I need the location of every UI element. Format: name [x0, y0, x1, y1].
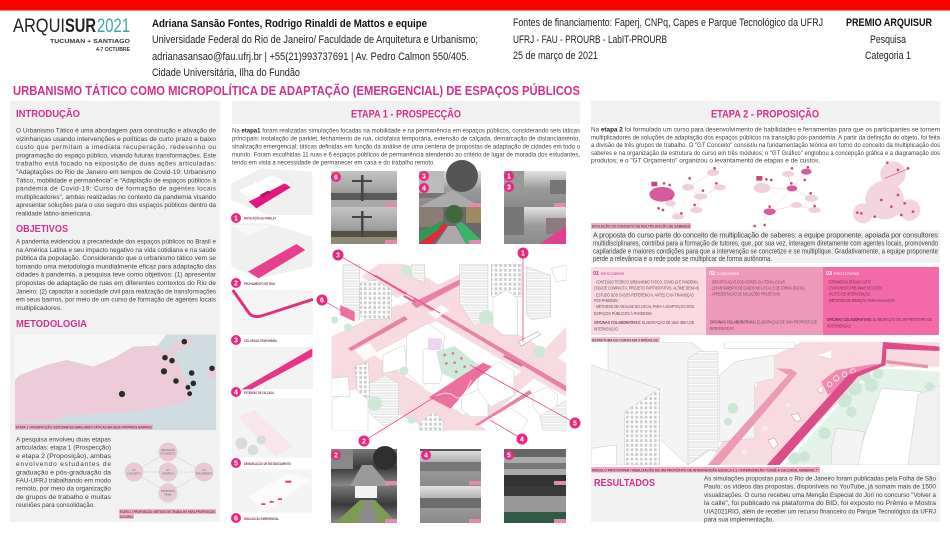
tactic 4: sidewalk extension: [231, 347, 313, 397]
photo pair 5: [504, 449, 566, 523]
module 02: OFICINAS COLABORATIVAS: ELABORAÇÃO DE UMA PROPOSTA DE: [710, 320, 817, 324]
module 01: PÓS-PANDEMIA: [594, 298, 618, 303]
pointer lines: [322, 253, 575, 441]
text: metodologia: reuniões para consolidação.: [16, 502, 95, 509]
text: objetivos: na América Latina e seu impacto negativo na vida cotidiana e na saúde: [16, 247, 216, 254]
photo pair 2: 2: [334, 452, 338, 460]
module 02: [706, 267, 823, 335]
photo pair 6: 6: [334, 174, 338, 182]
diagram: working groups: GT: [132, 468, 136, 472]
diagram: working groups: GT: [166, 468, 170, 472]
logo: Arquisur 2021: 4-7 OCTUBRE: [96, 47, 130, 53]
text: introdução: "Adaptações do Rio de Janeiro em tempos de Covid-19: Urbanismo: [16, 169, 216, 176]
photo pair 3 and 4: 4: [422, 186, 426, 192]
callout numbers: 3: [336, 252, 340, 260]
diagram: working groups: GT: [202, 468, 206, 472]
text: objetivos: Janeiro; (2) capacitar a sociedade civil para realização de transformações: [16, 288, 217, 295]
module 03: [823, 267, 939, 335]
funding block: UFRJ - FAU - PROURB - LabIT-PROURB: [513, 34, 667, 46]
buildings: [331, 264, 566, 431]
parklet: [518, 332, 541, 346]
panel: etapa 1: [231, 101, 581, 523]
module 02: - IDENTIFICAÇÃO DOS ATORES OU ITENS LOCAIS: [710, 280, 785, 284]
top red band: [0, 0, 950, 10]
diagram: working groups: PROPOSTA: [161, 489, 175, 493]
text: etapa 1: mundo. Foram escolhidas 11 ruas e 6 espaços públicos de permanência atendendo ao critério de lugar de moradia dos estudantes,: [232, 152, 580, 158]
park: [436, 346, 479, 381]
diagram: multiplication of knowledge: [649, 161, 920, 227]
text: objetivos: A pandemia evidenciou a precariedade dos espaços públicos no Brasil e: [16, 238, 216, 246]
text: etapa 1: Na etapa1 foram realizadas simulações focadas na mobilidade e na permanência em espaços públicos, considerando seis táticas: [232, 128, 581, 134]
caption: etapa 2: DO CURSO: [120, 515, 133, 519]
callout numbers: 1: [521, 250, 525, 258]
isometric prototype illustration: [591, 342, 940, 465]
central isometric street illustration: [331, 264, 566, 431]
left lane: [708, 368, 797, 465]
caption: módulo prototipar: [591, 467, 820, 472]
tactic 4: sidewalk extension: EXTENSÃO DE CALÇADA: [244, 390, 274, 395]
cluster 2: [753, 166, 821, 227]
caption: etapa 1: ETAPA 1 / PROSPECÇÃO: ESTUDANTES SIMULANDO TÁTICAS EM SEUS PRÓPRIOS BAIRROS: [16, 424, 152, 429]
heading: etapa 2: [591, 101, 940, 124]
tactic 6: emergency signage: 6: [234, 516, 238, 522]
tactic 5: distancing marks: [231, 398, 312, 468]
diagram: working groups: CONCEITO: [127, 472, 141, 476]
logo: Arquisur 2021: TUCUMAN + SANTIAGO: [50, 39, 131, 45]
diagram: working groups: ORÇAMENTO: [196, 472, 212, 476]
diagram: working groups: FINAL: [164, 492, 172, 496]
cluster 1: [649, 167, 726, 220]
text: introdução: programação do espaço público, visando futuras transformações. Este: [16, 152, 216, 159]
module 03: - LEVANTAMENTO PRELIMINAR DE CUSTOS: [827, 286, 882, 290]
trees: [724, 368, 934, 464]
authors block: Universidade Federal do Rio de Janeiro/ Faculdade de Arquitetura e Urbanismo;: [152, 34, 478, 46]
callout numbers: 5: [573, 420, 577, 428]
green area: [785, 368, 940, 465]
main title: URBANISMO TÁTICO COMO MICROPOLÍTICA DE ADAPTAÇÃO (EMERGENCIAL) DE ESPAÇOS PÚBLICOS: [13, 83, 580, 98]
caption: etapa 2: [119, 509, 216, 519]
heading: introdução: INTRODUÇÃO: [16, 107, 80, 120]
panel: resultados: [591, 472, 940, 524]
module 01: CIDADE COMPACTA, PROJETO PARTICIPATIVO, ALTINE DEMAIS: [594, 286, 699, 290]
text: resultados: Paulo; os vídeos das propostas, disponíveis no YouTube, já somam mais de 1500: [704, 484, 936, 491]
photo pair 2: [331, 446, 397, 523]
authors block: Cidade Universitária, Ilha do Fundão: [152, 67, 300, 79]
diagram: working groups: DEFINIÇÃO: [161, 447, 175, 452]
text: introdução: realidade latino-americana.: [16, 210, 92, 218]
module 03: 03 PROTOTIPAR: [826, 271, 859, 277]
caption: etapa 2: ETAPA 2 / PROPOSIÇÃO: MÉTODO DE TRABALHO PARA PROPOSIÇÃO: [120, 509, 215, 514]
module 01: INTERVENÇÃO: [594, 326, 618, 332]
authors block: Adriana Sansão Fontes, Rodrigo Rinaldi de Mattos e equipe: [152, 18, 427, 30]
logo: Arquisur 2021: ARQUI: [13, 15, 65, 37]
text: introdução: [16, 128, 217, 218]
module 03: OFICINAS COLABORATIVAS: ELABORAÇÃO DE UM PROTÓTIPO DE: [827, 317, 932, 322]
tactic 2: street closing: [231, 223, 312, 288]
caption: estrutura do curso: [591, 337, 660, 342]
module 03: - MÉTODOS DE MEDIÇÃO PARA AVALIAÇÃO: [827, 298, 895, 303]
text: objetivos: multiplicadores.: [16, 305, 62, 312]
caption: evolução do conceito: [591, 223, 691, 229]
funding block: Fontes de financiamento: Faperj, CNPq, Capes e Parque Tecnológico da UFRJ: [513, 17, 823, 29]
caption: módulo prototipar: MÓDULO PROTOTIPAR / REALIZAÇÃO DE UM PROTÓTIPO DE INTERVENÇÃO ESCALA 1:1 / INTERVENÇÃO "CADÊ A CALÇADA, GENERAL?": [592, 467, 819, 472]
heading: metodologia: METODOLOGIA: [16, 319, 88, 330]
text: objetivos: tornando uma metodologia mundialmente eficaz para adaptação das: [16, 263, 217, 270]
heading: objetivos: OBJETIVOS: [16, 224, 68, 235]
module 01: 01 DESCOBRIR: [593, 271, 625, 277]
road markings: [742, 403, 790, 455]
authors block: adrianasansao@fau.ufrj.br | +55(21)993737691 | Av. Pedro Calmon 550/405.: [152, 51, 469, 63]
text: etapa 2: Na etapa 2 foi formulado um curso para desenvolvimento de habilidades e ferramentas para que os participantes se tornem: [591, 126, 940, 134]
heading: etapa 1: ETAPA 1 - PROSPECÇÃO: [351, 108, 461, 120]
photo pair 3 and 4: 3: [422, 174, 426, 180]
parked marks: [768, 385, 823, 448]
main lane: [767, 342, 940, 465]
text: introdução: pandemia de Covid-19: Curso de formação de agentes locais: [16, 186, 217, 193]
panel: left column: [10, 101, 220, 522]
text: etapa 2: produtos; e o "GT Orçamento" organizou o levantamento de etapas e de custos.: [591, 158, 820, 164]
text: resultados: para sua implementação.: [704, 516, 774, 524]
module 02: - APRESENTAÇÃO DE SOLUÇÕES PROJETUAIS: [710, 292, 780, 296]
diagram: working groups: DO OBJETO: [161, 452, 175, 456]
logo: Arquisur 2021: [13, 15, 131, 53]
funding block: 25 de março de 2021: [513, 50, 598, 62]
text: metodologia: articuladas: etapa 1 (Prospecção): [16, 445, 111, 452]
text: metodologia: A pesquisa envolveu duas etapas: [16, 436, 112, 444]
tactic 5: distancing marks: DEMARCAÇÃO DE DISTANCIAMENTO: [244, 461, 291, 466]
tactic 5: distancing marks: 5: [234, 460, 238, 468]
diagram: working groups: GRÁFICO: [162, 472, 174, 476]
diagram: working groups: [124, 442, 214, 502]
photo pair 3 and 4: [419, 160, 481, 244]
text: etapa 1: sinalização emergencial; táticas definidas em função da análise de uma centena de propostas de adaptação de cidades em todo o: [232, 144, 580, 150]
text: etapa 1: principais: instalação de parklet, fechamento de rua, ciclofaixa temporária, extensão de calçada, demarcação de distanciamento,: [232, 136, 580, 142]
text: introdução: vizinhanças usando intervenções e políticas de curto prazo e baixo: [16, 136, 216, 143]
tactic 3: temporary bike lane: CICLOFAIXA TEMPORÁRIA: [244, 338, 277, 343]
plaza: [821, 363, 878, 395]
text: etapa 2: [591, 126, 941, 164]
photo pair 6: [331, 171, 397, 244]
callout numbers: 4: [520, 436, 524, 444]
pink plaza: [429, 363, 492, 409]
upper right band: [886, 360, 928, 368]
tactic 2: street closing: 2: [234, 280, 238, 288]
photo pair 1 and 3: 3: [507, 184, 511, 192]
authors block: [152, 18, 478, 79]
heading: etapa 1: [232, 101, 580, 124]
tactic 4: sidewalk extension: 4: [234, 390, 238, 396]
module 03: - FERRAMENTAS DE BAIXO CUSTO: [827, 280, 871, 284]
text: introdução: apresentar soluções para o uso seguro dos espaços públicos dentro da: [16, 202, 216, 209]
tactic 6: emergency signage: SINALIZAÇÃO EMERGENCIAL: [244, 516, 279, 521]
text: objetivos: em seus bairros, por meio de um curso de formação de agentes locais: [16, 297, 217, 304]
module 02: INTERVENÇÃO: [710, 326, 734, 331]
text: metodologia: remoto, por meio da organização: [16, 486, 111, 493]
module 03: INTERVENÇÃO: [827, 324, 851, 328]
award block: PREMIO ARQUISUR: [846, 17, 932, 29]
road: [708, 342, 940, 465]
text: resultados: visualizações. O curso recebeu uma Menção Especial do Júri no concurso "Volver a: [704, 492, 936, 499]
text: introdução: multiplicadores", ambas realizadas no contexto da pandemia visando: [16, 194, 216, 201]
text: etapa 1: [232, 128, 581, 166]
photo pair 5: 5: [507, 452, 511, 460]
text: objetivos: propostas de adaptação de ruas em diferentes contextos do Rio de: [16, 280, 216, 287]
text block: proposta do curso: [591, 230, 940, 263]
photo pair 4: 4: [424, 452, 428, 460]
funding block: [513, 17, 823, 62]
trees: [331, 265, 546, 424]
cluster 3: [853, 161, 920, 223]
photo pair 1 and 3: [504, 171, 566, 244]
text: metodologia: de grupos de trabalho e muitas: [16, 494, 112, 501]
text: objetivos: cidades à pandemia, a pesquisa teve como objetivos: (1) apresentar: [16, 272, 217, 279]
award block: [846, 17, 932, 62]
panel: etapa 2: [591, 101, 941, 524]
road network: [331, 264, 566, 431]
heading: resultados: RESULTADOS: [594, 478, 655, 489]
text: metodologia: envolvendo estudantes de: [16, 461, 111, 468]
tactic 3: temporary bike lane: [231, 290, 313, 345]
tactic 1: parklet: [231, 168, 312, 223]
module 01: ESPAÇOS PÚBLICOS À PANDEMIA: [594, 311, 652, 316]
text: metodologia: FAU-UFRJ trabalhando em modo: [16, 478, 111, 484]
caption: evolução do conceito: EVOLUÇÃO DO CONCEITO DE MULTIPLICAÇÃO DE SABERES: [592, 224, 690, 229]
text: objetivos: [16, 238, 217, 312]
text block: proposta do curso: A proposta do curso parte do conceito de multiplicação de saberes: a equipe proponente, apoiada por consultores: [593, 230, 938, 240]
callout numbers: [316, 248, 580, 446]
tactic 1: parklet: INSTALAÇÃO DE PARKLET: [244, 216, 276, 220]
award block: Categoria 1: [865, 50, 911, 62]
text: resultados: [704, 476, 936, 524]
module 01: [591, 267, 706, 335]
heading: etapa 2: ETAPA 2 - PROPOSIÇÃO: [711, 108, 819, 120]
map of Rio de Janeiro with pins: [15, 334, 216, 430]
tactic 6: emergency signage: [231, 469, 312, 523]
dark bands: [348, 275, 566, 426]
module 01: - CONTEÚDO TEÓRICO (URBANISMO TÁTICO, COVID-19 E PANDEMIA,: [594, 280, 699, 284]
tactic 3: temporary bike lane: 3: [234, 338, 238, 344]
text: introdução: Tático, mobilidade e permanência" e "Adaptação de espaços públicos à: [16, 177, 216, 184]
text block: proposta do curso: perde a relevância e a rede pode se multiplicar de forma autônoma.: [593, 254, 772, 263]
photo pair 4: [420, 449, 481, 523]
callout numbers: 2: [362, 438, 366, 446]
text: introdução: trabalho está focado na exposição de duas ações articuladas:: [16, 161, 216, 168]
module 01: OFICINAS COLABORATIVAS: ELABORAÇÃO DE UMA IDEIA DE: [594, 320, 694, 325]
text: metodologia: e etapa 2 (Proposição), ambas: [16, 453, 112, 460]
text: resultados: As simulações propostas para o Rio de Janeiro foram publicadas pela Folha de São: [704, 476, 936, 482]
crosswalks: [355, 293, 450, 361]
text: introdução: custo que permitam a imediata recuperação, redesenho ou: [16, 144, 216, 151]
module 02: - LEVANTAMENTO DE DADOS NO LOCAL E DE FORMA DIGITAL: [710, 286, 805, 290]
caption: estrutura do curso: ESTRUTURA DO CURSO EM 3 MÓDULOS:: [592, 337, 659, 342]
award block: Pesquisa: [870, 34, 907, 46]
photo pair 1 and 3: 1: [507, 174, 511, 180]
text: metodologia: graduação e pós-graduação da: [16, 469, 111, 476]
logo: Arquisur 2021: 2021: [97, 15, 130, 37]
module 03: - PILOTO DE INTERVENÇÃO: [827, 292, 870, 296]
pink billboard: [340, 305, 355, 322]
caption: etapa 1: [15, 424, 153, 430]
module 02: 02 CONCEBER: [709, 271, 739, 277]
text: resultados: la calle", foi publicado na plataforma do BID, foi exposto no Prêmio e Mostra: [704, 500, 936, 507]
text: etapa 1: tendo em vista a necessidade de permanecer em casa e do trabalho remoto.: [232, 160, 435, 166]
text: resultados: UIA2021RIO, além de receber um recurso financeiro do Parque Tecnológico da UFRJ: [704, 508, 936, 515]
tactic 1: parklet: 1: [234, 216, 238, 222]
text: metodologia: [16, 436, 112, 509]
module 01: - ESTUDO DOS CASOS REFERÊNCIA: ANTES E NA TRANSIÇÃO: [594, 292, 694, 298]
module 01: - MÉTODOS DE ANÁLISE DO LOCAL PARA A ADAPTAÇÃO DOS: [594, 304, 694, 309]
logo: Arquisur 2021: SUR: [65, 15, 96, 37]
callout numbers: 6: [320, 298, 324, 304]
text: introdução: O Urbanismo Tático é uma abordagem para construção e ativação de: [16, 128, 216, 134]
tactic 2: street closing: FECHAMENTO DE RUA: [244, 282, 275, 286]
text: objetivos: pública da população. Considerando que o urbanismo tático vem se: [16, 255, 216, 262]
buildings: [608, 342, 708, 465]
